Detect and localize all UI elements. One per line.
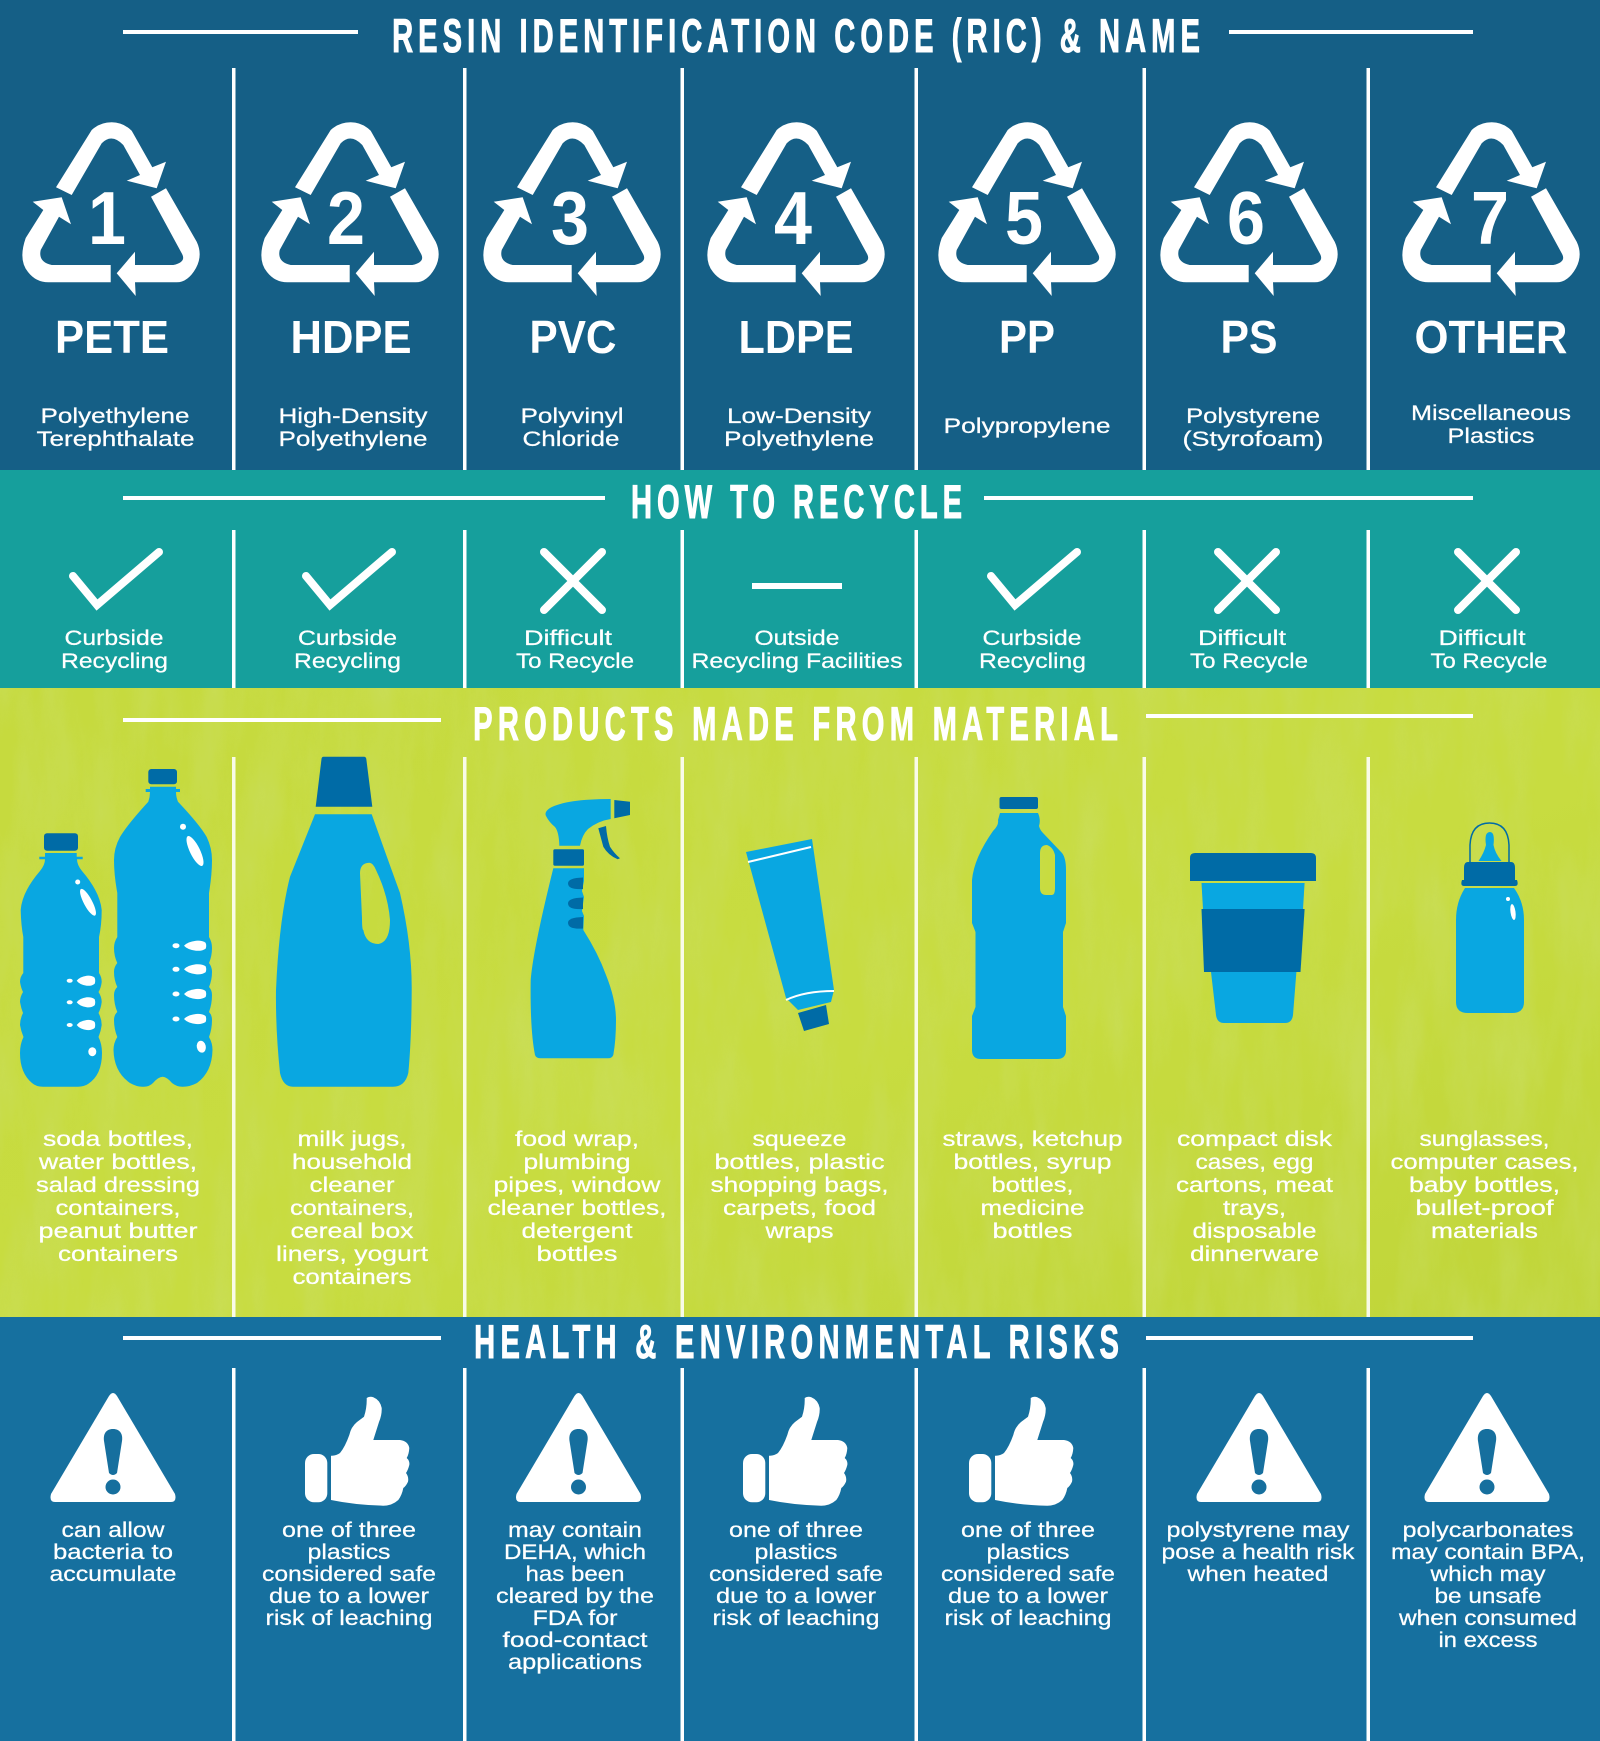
text: products OTHER: sunglasses, — [1420, 1127, 1550, 1151]
recycle status: curbside 1 — [61, 552, 168, 673]
risk: LDPE thumbs up: risk of leaching — [712, 1606, 880, 1630]
text: products HDPE: milk jugs, — [298, 1127, 406, 1151]
panel: resin code section background — [0, 0, 1600, 470]
risk: PVC warning: FDA for — [532, 1606, 618, 1630]
column: LDPE: 4 — [774, 176, 812, 260]
recycle status: curbside 1: Curbside — [64, 626, 164, 650]
icon: spray bottle — [531, 799, 630, 1058]
text: products LDPE: bottles, plastic — [714, 1150, 885, 1174]
text: products HDPE: cleaner — [310, 1173, 394, 1197]
recycle status: difficult 6: Difficult — [1198, 626, 1286, 650]
text: products PETE: soda bottles, — [43, 1127, 193, 1151]
recycle status: curbside 2 — [294, 552, 401, 673]
column: HDPE: 2 — [327, 176, 365, 260]
column: PP: PP — [999, 311, 1055, 363]
recycle status: outside facilities 4 — [692, 583, 902, 673]
icon: baby bottle — [1456, 823, 1524, 1013]
text: products PS: trays, — [1223, 1196, 1286, 1220]
text: products PVC: detergent — [522, 1219, 633, 1243]
text: products PS: compact disk — [1177, 1127, 1332, 1151]
risk: LDPE thumbs up: due to a lower — [716, 1584, 876, 1608]
text: products PETE: water bottles, — [38, 1150, 197, 1174]
risk: LDPE thumbs up: considered safe — [709, 1562, 883, 1586]
column: PS: (Styrofoam) — [1182, 427, 1324, 451]
text: products PETE — [36, 1127, 200, 1266]
risk: OTHER warning: may contain BPA, — [1391, 1540, 1585, 1564]
risk: PVC warning — [496, 1393, 654, 1674]
column: PETE: 1 — [88, 176, 126, 260]
risk: PP thumbs up — [941, 1397, 1115, 1630]
text: products OTHER: baby bottles, — [1409, 1173, 1560, 1197]
column: OTHER: OTHER — [1414, 311, 1568, 363]
text: products PVC: bottles — [536, 1242, 618, 1266]
heading: health and environmental risks: HEALTH & ENVIRONMENTAL RISKS — [474, 1317, 1119, 1369]
risk: PVC warning: applications — [508, 1650, 642, 1674]
text: products HDPE: containers, — [290, 1196, 414, 1220]
recycle status: difficult 3 — [516, 552, 634, 673]
text: products PVC: pipes, window — [494, 1173, 661, 1197]
text: products PP: bottles — [992, 1219, 1072, 1243]
column: PS: Polystyrene — [1186, 404, 1320, 428]
risk: PETE warning: bacteria to — [53, 1540, 173, 1564]
risk: OTHER warning: in excess — [1438, 1628, 1538, 1652]
recycle status: difficult 3: To Recycle — [516, 649, 634, 673]
risk: HDPE thumbs up — [262, 1397, 436, 1630]
icon: jug — [276, 757, 412, 1087]
column: LDPE: Polyethylene — [724, 427, 874, 451]
risk: PS warning: pose a health risk — [1162, 1540, 1355, 1564]
text: products HDPE: household — [292, 1150, 412, 1174]
risk: HDPE thumbs up: due to a lower — [269, 1584, 429, 1608]
text: products PETE: containers, — [56, 1196, 180, 1220]
risk: PP thumbs up: risk of leaching — [944, 1606, 1112, 1630]
text: products PETE: salad dressing — [36, 1173, 200, 1197]
recycle status: outside facilities 4: Recycling Facilities — [692, 649, 902, 673]
column: LDPE: LDPE — [738, 311, 854, 363]
text: products PP: bottles, syrup — [954, 1150, 1112, 1174]
column: PETE — [22, 122, 200, 451]
risk: PP thumbs up: one of three — [961, 1518, 1095, 1542]
risk: OTHER warning: which may — [1429, 1562, 1546, 1586]
column: HDPE: HDPE — [290, 311, 412, 363]
risk: PS warning — [1162, 1393, 1355, 1586]
column: PETE: Polyethylene — [40, 404, 190, 428]
risk: OTHER warning: polycarbonates — [1402, 1518, 1574, 1542]
recycle status: curbside 5: Curbside — [982, 626, 1082, 650]
risk: HDPE thumbs up: considered safe — [262, 1562, 436, 1586]
text: products OTHER: computer cases, — [1390, 1150, 1578, 1174]
text: products OTHER: materials — [1431, 1219, 1538, 1243]
column: PS: 6 — [1227, 176, 1265, 260]
recycle status: difficult 3: Difficult — [524, 626, 612, 650]
text: products PP: straws, ketchup — [942, 1127, 1123, 1151]
text: products LDPE: squeeze — [752, 1127, 846, 1151]
column: PS — [1160, 122, 1338, 451]
column: LDPE — [707, 122, 885, 451]
icon: cup — [1190, 853, 1316, 1023]
column: HDPE — [261, 122, 439, 451]
column: OTHER — [1402, 122, 1580, 448]
risk: PP thumbs up: plastics — [986, 1540, 1070, 1564]
column: HDPE: Polyethylene — [278, 427, 428, 451]
recycle status: curbside 2: Curbside — [298, 626, 397, 650]
text: products PS: disposable — [1192, 1219, 1316, 1243]
text: products PS: dinnerware — [1190, 1242, 1319, 1266]
risk: PS warning: when heated — [1186, 1562, 1328, 1586]
recycle status: difficult 7: To Recycle — [1430, 649, 1548, 673]
recycle status: difficult 7: Difficult — [1438, 626, 1526, 650]
risk: LDPE thumbs up: plastics — [754, 1540, 838, 1564]
text: products PVC: cleaner bottles, — [488, 1196, 666, 1220]
column: PETE: PETE — [55, 311, 169, 363]
risk: PS warning: polystyrene may — [1166, 1518, 1350, 1542]
panel: health risks section background — [0, 1317, 1600, 1741]
risk: PVC warning: food-contact — [502, 1628, 648, 1652]
heading: products made from material: PRODUCTS MADE FROM MATERIAL — [473, 699, 1118, 751]
column: LDPE: Low-Density — [727, 404, 871, 428]
icon: squeeze tube — [746, 839, 834, 1031]
recycle status: outside facilities 4: Outside — [754, 626, 840, 650]
icon: two soda bottles — [20, 769, 212, 1087]
column: PVC: PVC — [530, 311, 616, 363]
risk: PETE warning: accumulate — [50, 1562, 176, 1586]
panel: products section background — [0, 688, 1600, 1317]
text: products HDPE: cereal box — [290, 1219, 414, 1243]
risk: LDPE thumbs up — [709, 1397, 883, 1630]
column: PVC: Chloride — [522, 427, 620, 451]
text: products PVC: plumbing — [524, 1150, 630, 1174]
text: products HDPE — [276, 1127, 428, 1289]
column: PP: Polypropylene — [944, 414, 1110, 438]
column: PVC: Polyvinyl — [520, 404, 624, 428]
risk: LDPE thumbs up: one of three — [729, 1518, 863, 1542]
text: products PP — [942, 1127, 1123, 1243]
recycle status: difficult 7 — [1430, 552, 1548, 673]
risk: OTHER warning: when consumed — [1398, 1606, 1577, 1630]
text: products PP: medicine — [980, 1196, 1084, 1220]
risk: PVC warning: DEHA, which — [504, 1540, 646, 1564]
recycle status: curbside 1: Recycling — [61, 649, 168, 673]
text: products LDPE: wraps — [764, 1219, 834, 1243]
text: products PS: cases, egg — [1196, 1150, 1314, 1174]
heading: how to recycle: HOW TO RECYCLE — [631, 477, 962, 529]
column: PVC: 3 — [551, 176, 589, 260]
text: products PS: cartons, meat — [1176, 1173, 1333, 1197]
text: products OTHER: bullet-proof — [1416, 1196, 1554, 1220]
column: PETE: Terephthalate — [36, 427, 194, 451]
heading: resin identification code: RESIN IDENTIFICATION CODE (RIC) & NAME — [392, 11, 1200, 63]
column: OTHER: Miscellaneous — [1411, 401, 1571, 425]
icon: ketchup bottle — [972, 797, 1066, 1059]
recycle status: curbside 5 — [979, 552, 1086, 673]
column: OTHER: Plastics — [1448, 424, 1534, 448]
text: products PVC: food wrap, — [515, 1127, 639, 1151]
recycle status: curbside 2: Recycling — [294, 649, 401, 673]
text: products PETE: containers — [58, 1242, 178, 1266]
risk: PVC warning: cleared by the — [496, 1584, 654, 1608]
text: products HDPE: containers — [292, 1265, 412, 1289]
panel: how to recycle section background — [0, 470, 1600, 688]
recycle status: curbside 5: Recycling — [979, 649, 1086, 673]
risk: OTHER warning — [1391, 1393, 1585, 1652]
text: products OTHER — [1390, 1127, 1578, 1243]
text: products PP: bottles, — [992, 1173, 1074, 1197]
risk: PETE warning — [50, 1393, 176, 1586]
column: PS: PS — [1220, 311, 1278, 363]
risk: HDPE thumbs up: one of three — [282, 1518, 416, 1542]
column: PP — [938, 122, 1116, 438]
risk: HDPE thumbs up: risk of leaching — [266, 1606, 432, 1630]
risk: PETE warning: can allow — [62, 1518, 165, 1542]
text: products HDPE: liners, yogurt — [276, 1242, 428, 1266]
text: products LDPE: shopping bags, — [710, 1173, 888, 1197]
risk: HDPE thumbs up: plastics — [308, 1540, 390, 1564]
column: HDPE: High-Density — [278, 404, 428, 428]
text: products PETE: peanut butter — [38, 1219, 198, 1243]
risk: PP thumbs up: due to a lower — [948, 1584, 1108, 1608]
text: products PS — [1176, 1127, 1333, 1266]
column: PP: 5 — [1005, 176, 1043, 260]
recycle status: difficult 6: To Recycle — [1190, 649, 1308, 673]
column: PVC — [483, 122, 661, 451]
text: products PVC — [488, 1127, 666, 1266]
risk: PVC warning: has been — [526, 1562, 624, 1586]
text: products LDPE — [710, 1127, 888, 1243]
risk: PVC warning: may contain — [508, 1518, 642, 1542]
column: OTHER: 7 — [1471, 176, 1509, 260]
risk: OTHER warning: be unsafe — [1434, 1584, 1542, 1608]
recycle status: difficult 6 — [1190, 552, 1308, 673]
text: products LDPE: carpets, food — [723, 1196, 876, 1220]
risk: PP thumbs up: considered safe — [941, 1562, 1115, 1586]
